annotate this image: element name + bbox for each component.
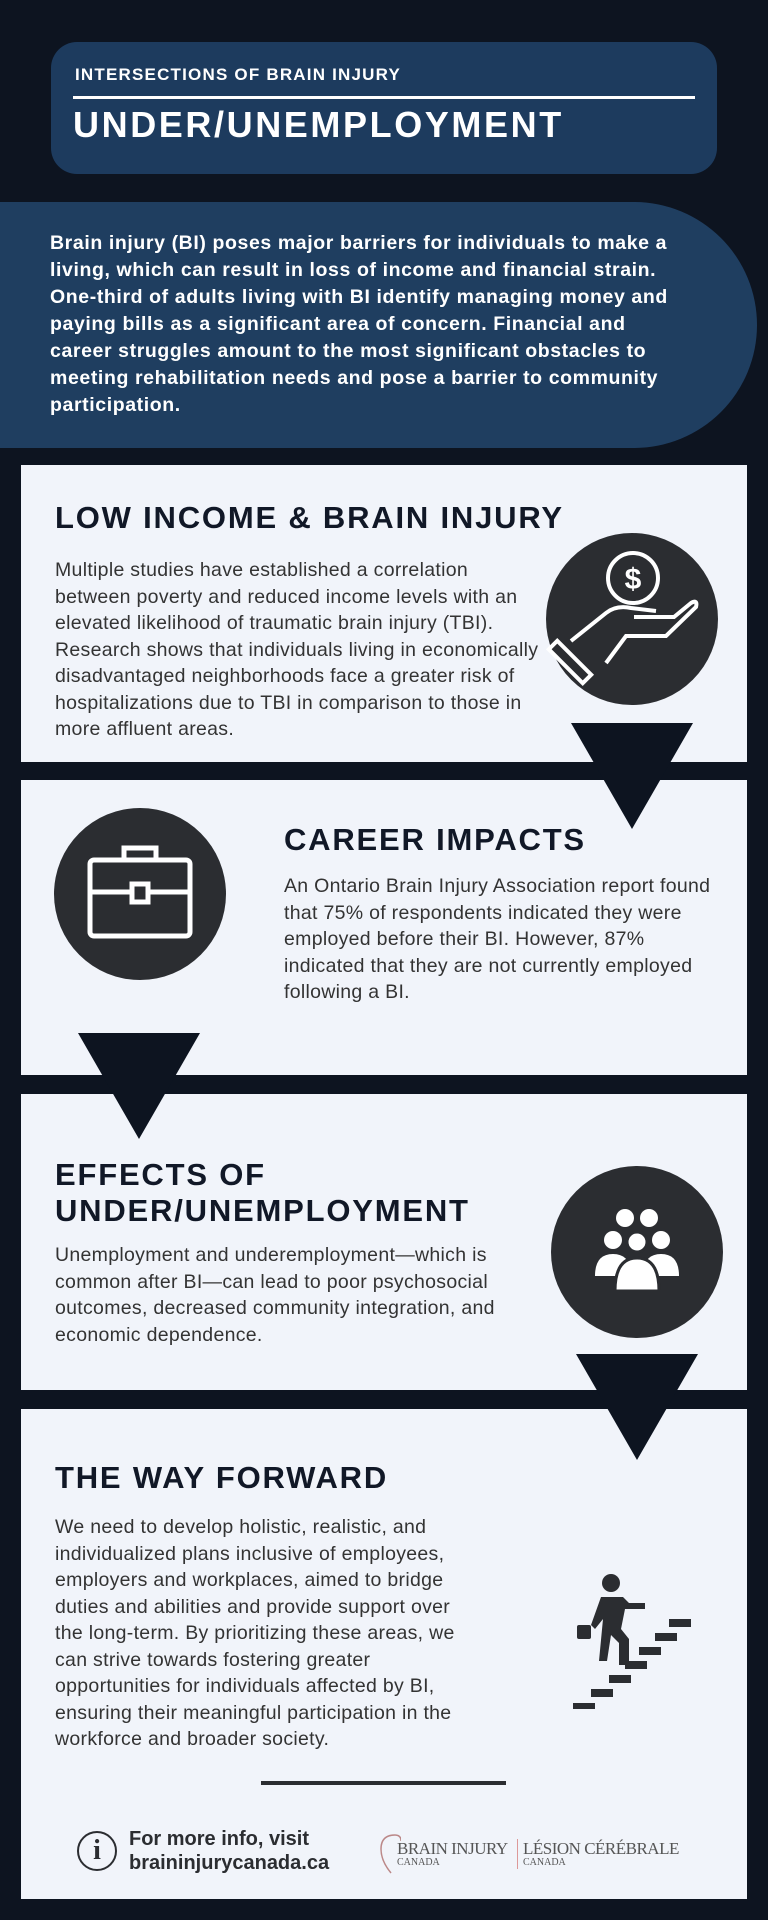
text: the long-term. By prioritizing these areas, we <box>55 1622 455 1644</box>
intro text: career struggles amount to the most significant obstacles to <box>50 340 646 362</box>
logo: LÉSION CÉRÉBRALE <box>523 1839 679 1858</box>
footer text: For more info, visit <box>129 1828 309 1850</box>
logo <box>380 1834 679 1874</box>
text: economic dependence. <box>55 1324 263 1346</box>
intro text <box>50 232 668 416</box>
text <box>284 875 710 1003</box>
icon: info <box>77 1831 117 1871</box>
arrow 1 <box>571 723 693 829</box>
icon: person climbing stairs <box>573 1574 691 1709</box>
icon: info: i <box>93 1835 101 1866</box>
icon: hand with coin: $ <box>625 563 642 596</box>
intro text: Brain injury (BI) poses major barriers for individuals to make a <box>50 232 667 254</box>
text: Research shows that individuals living in economically <box>55 638 538 660</box>
text: can strive towards fostering greater <box>55 1648 370 1670</box>
text <box>55 1516 455 1750</box>
text: We need to develop holistic, realistic, and <box>55 1516 426 1538</box>
header box <box>51 42 717 174</box>
text: more affluent areas. <box>55 718 234 740</box>
intro text: meeting rehabilitation needs and pose a barrier to community <box>50 367 658 389</box>
icon: hand with coin <box>546 533 718 705</box>
heading: UNDER/UNEMPLOYMENT <box>55 1193 470 1228</box>
heading: THE WAY FORWARD <box>55 1460 388 1495</box>
text: indicated that they are not currently employed <box>284 954 692 976</box>
panel: way forward <box>21 1409 747 1899</box>
logo: CANADA <box>523 1857 566 1868</box>
heading <box>55 1157 470 1228</box>
text: duties and abilities and provide support over <box>55 1596 450 1618</box>
text: outcomes, decreased community integration, and <box>55 1297 495 1319</box>
heading: EFFECTS OF <box>55 1157 266 1192</box>
text: between poverty and reduced income levels with an <box>55 586 517 608</box>
text: workforce and broader society. <box>55 1728 329 1750</box>
intro text: participation. <box>50 394 181 416</box>
text: ensuring their meaningful participation in the <box>55 1702 451 1724</box>
logo: CANADA <box>397 1857 440 1868</box>
icon: briefcase <box>54 808 226 980</box>
text <box>55 1244 495 1346</box>
arrow 3 <box>576 1354 698 1460</box>
text: common after BI—can lead to poor psychosocial <box>55 1270 488 1292</box>
header title: UNDER/UNEMPLOYMENT <box>73 104 564 145</box>
text <box>55 559 538 740</box>
text: Multiple studies have established a correlation <box>55 559 468 581</box>
intro text: paying bills as a significant area of concern. Financial and <box>50 313 626 335</box>
text: hospitalizations due to TBI in comparison to those in <box>55 692 521 714</box>
intro text: One-third of adults living with BI identify managing money and <box>50 286 668 308</box>
text: individualized plans inclusive of employees, <box>55 1542 444 1564</box>
header subtitle: INTERSECTIONS OF BRAIN INJURY <box>75 65 401 84</box>
footer info <box>77 1828 330 1874</box>
arrow 2 <box>78 1033 200 1139</box>
heading: CAREER IMPACTS <box>284 822 586 857</box>
footer text <box>129 1828 330 1874</box>
intro blob <box>0 202 757 448</box>
text: opportunities for individuals affected by BI, <box>55 1675 435 1697</box>
text: Unemployment and underemployment—which is <box>55 1244 487 1266</box>
panel: low income <box>21 465 747 762</box>
intro text: living, which can result in loss of income and financial strain. <box>50 259 656 281</box>
text: elevated likelihood of traumatic brain injury (TBI). <box>55 612 493 634</box>
text: employers and workplaces, aimed to bridge <box>55 1569 443 1591</box>
heading: LOW INCOME & BRAIN INJURY <box>55 500 564 535</box>
footer text: braininjurycanada.ca <box>129 1852 329 1874</box>
panel: career impacts <box>21 780 747 1075</box>
text: that 75% of respondents indicated they were <box>284 902 682 924</box>
text: An Ontario Brain Injury Association report found <box>284 875 710 897</box>
text: following a BI. <box>284 981 410 1003</box>
panel: effects <box>21 1094 747 1390</box>
icon: group of people <box>551 1166 723 1338</box>
text: disadvantaged neighborhoods face a greater risk of <box>55 665 514 687</box>
logo: BRAIN INJURY <box>397 1839 508 1858</box>
text: employed before their BI. However, 87% <box>284 928 644 950</box>
